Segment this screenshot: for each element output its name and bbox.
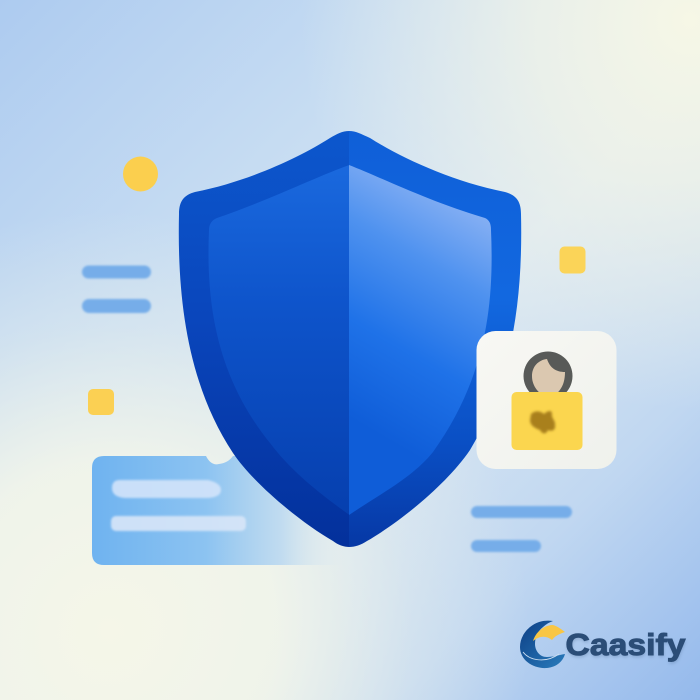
shield rim right half	[349, 131, 521, 547]
padlock body	[512, 392, 582, 450]
padlock keyhole smudge	[530, 411, 555, 433]
logo mark	[520, 621, 565, 668]
shield rim left half	[179, 131, 350, 547]
icon: yellow coin	[123, 156, 158, 192]
text placeholder lines: upper left	[82, 266, 151, 313]
logo wordmark: Caasify	[566, 627, 686, 662]
logo: Caasify	[520, 621, 687, 668]
panel: blue message card	[92, 456, 345, 565]
icon: security shield	[179, 131, 521, 547]
icon: yellow square left	[88, 389, 114, 415]
panel: user lock card	[476, 331, 616, 469]
icon: yellow square upper right	[560, 246, 586, 274]
user avatar	[524, 352, 572, 400]
card text line 1	[112, 480, 221, 498]
logo wordmark shadow: Caasify	[566, 629, 687, 664]
text placeholder lines: lower right	[471, 506, 572, 552]
shield inner right half	[349, 165, 492, 515]
shield inner left half	[208, 165, 350, 515]
card text line 2	[111, 516, 246, 531]
